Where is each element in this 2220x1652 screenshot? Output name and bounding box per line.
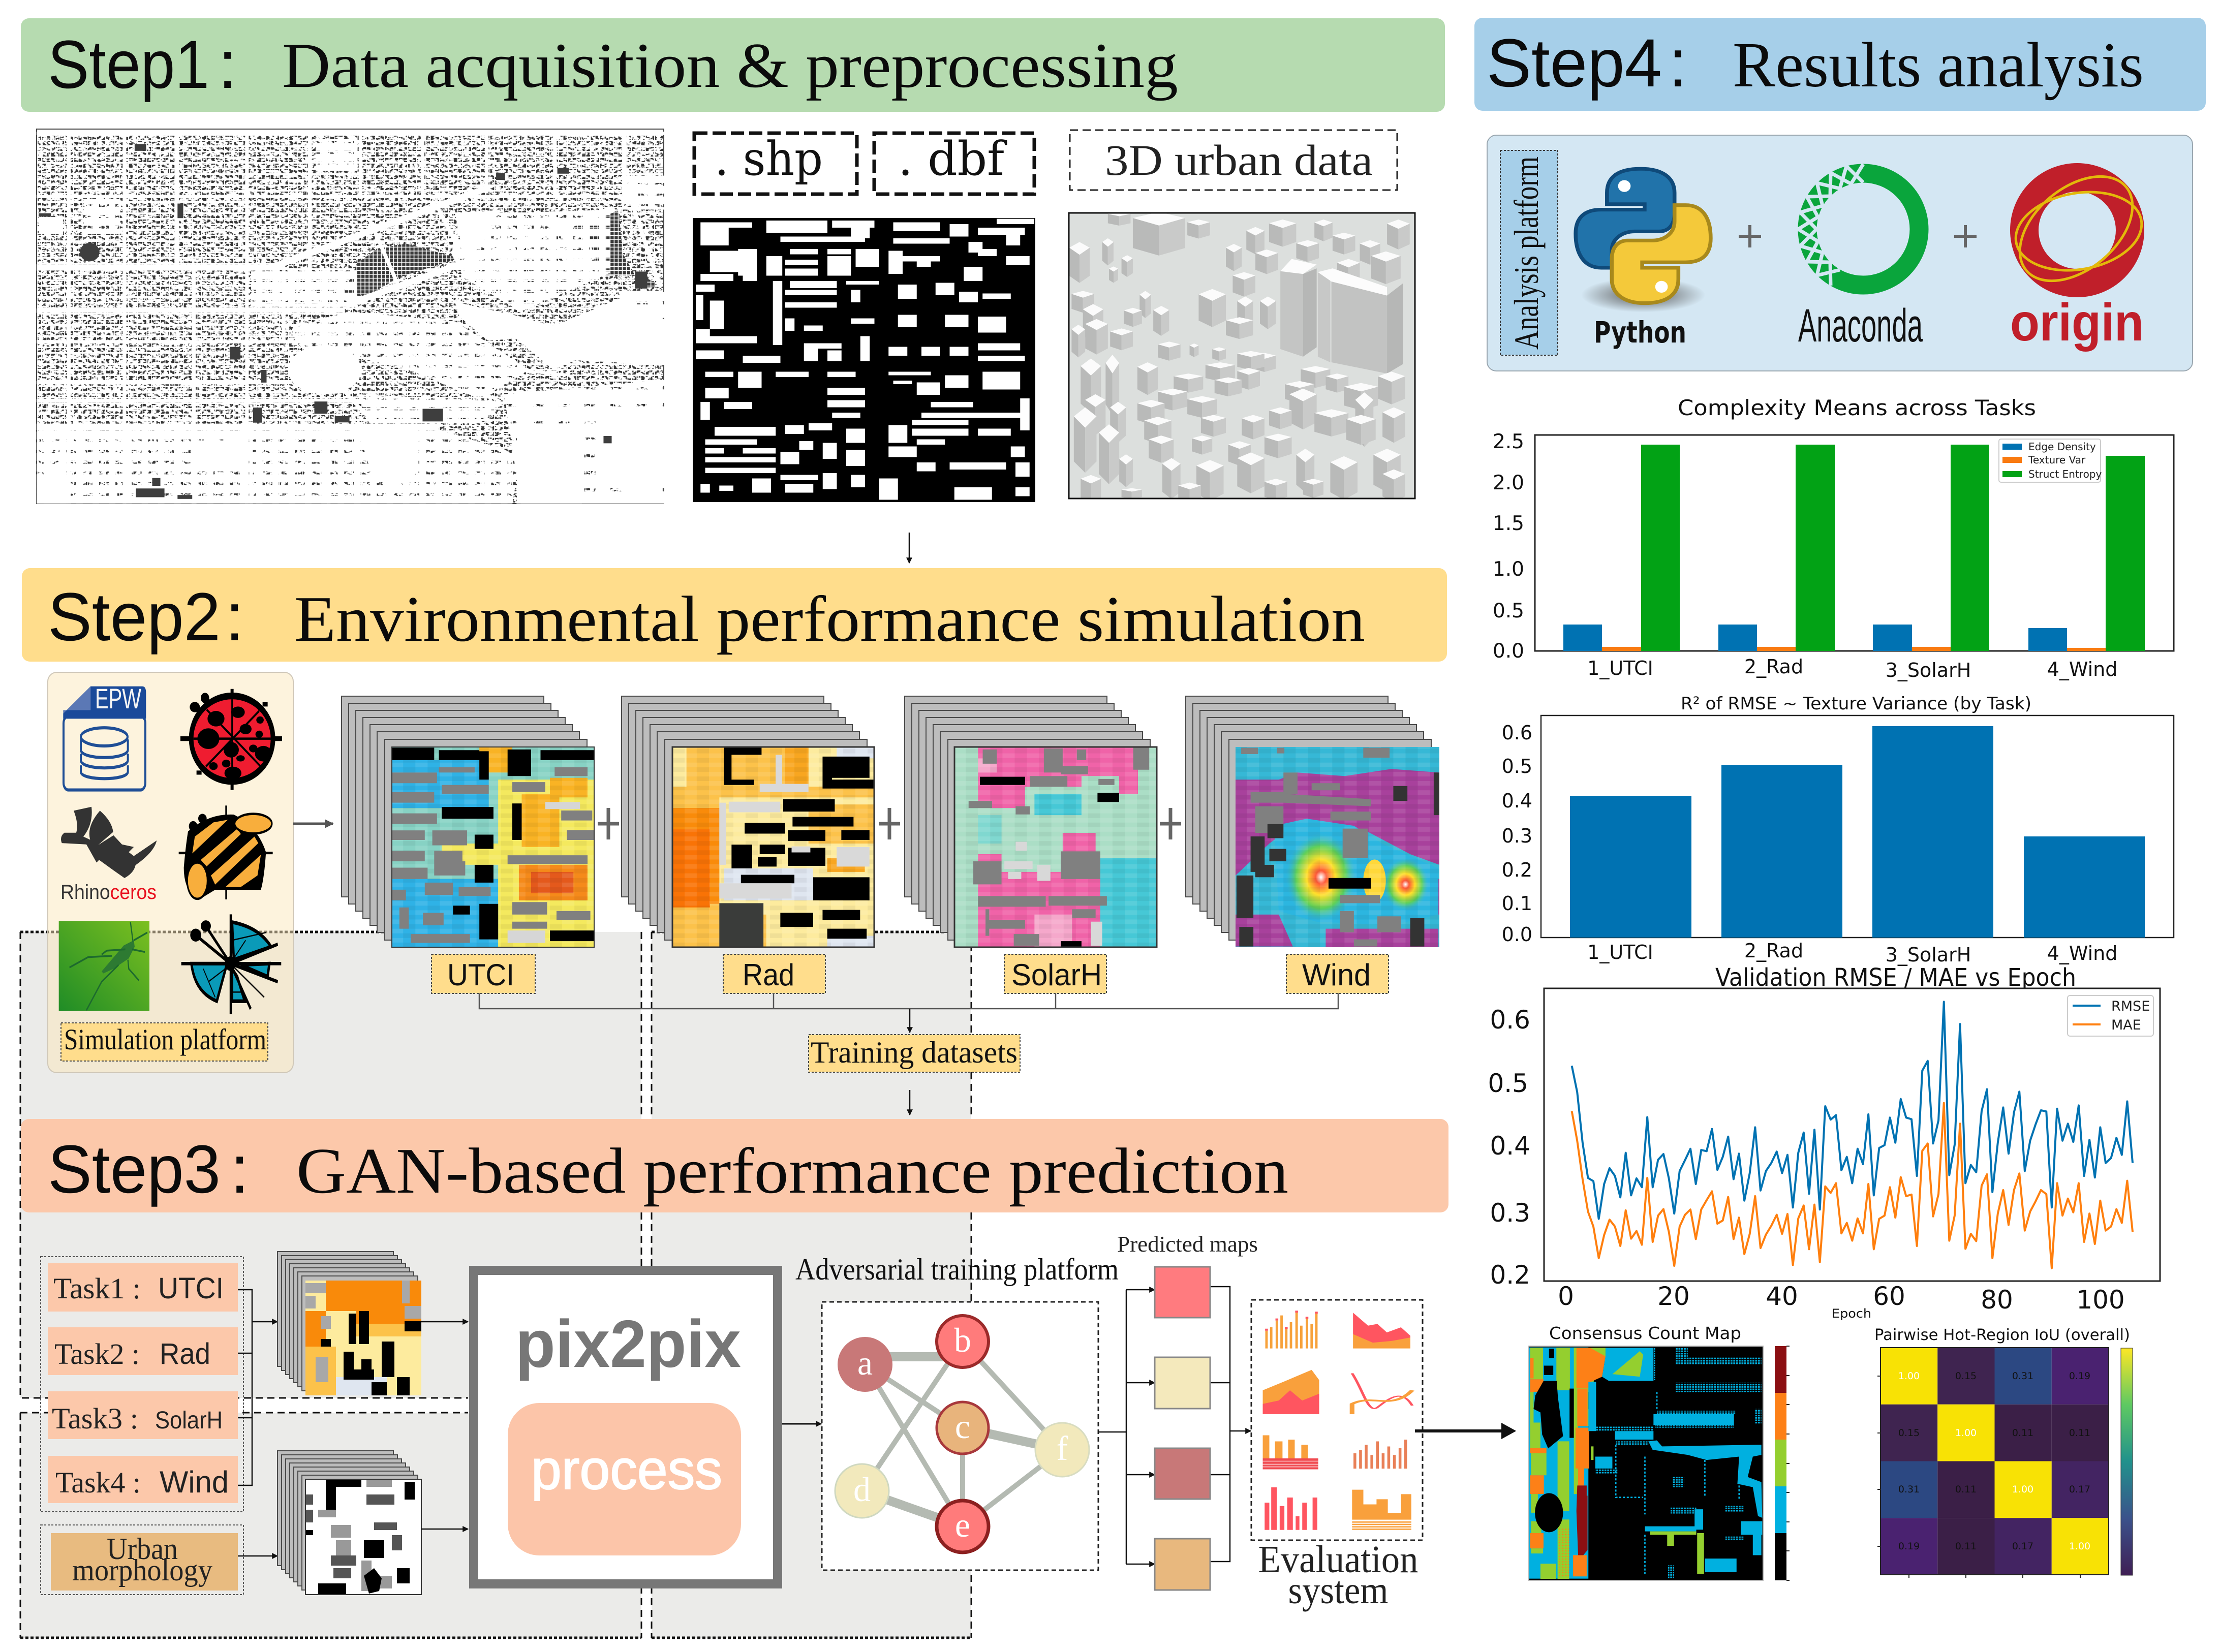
task 4: Wind bbox=[160, 1465, 229, 1499]
predicted maps connectors bbox=[1098, 1287, 1251, 1564]
x tick labels: 60 bbox=[1873, 1282, 1905, 1311]
y tick labels: 0.3 bbox=[1502, 825, 1532, 847]
heatmap cell values: 0.31 bbox=[2012, 1370, 2033, 1382]
icon: rhinoceros bbox=[61, 807, 157, 878]
label: training datasets: Training datasets bbox=[811, 1036, 1017, 1069]
arrow: morphology to pix2pix bbox=[421, 1529, 468, 1530]
icon: ladybug bbox=[180, 689, 282, 790]
predicted map squares bbox=[1155, 1267, 1210, 1590]
label: Rad: Rad bbox=[743, 958, 794, 992]
label: SolarH: SolarH bbox=[1011, 958, 1102, 992]
chart: R2 of RMSE vs texture variance bbox=[1502, 694, 2174, 966]
plus sign bbox=[1160, 808, 1181, 839]
node f: f bbox=[1057, 1429, 1068, 1468]
heading: step 3 bbox=[21, 1119, 1448, 1212]
node b: b bbox=[954, 1321, 971, 1359]
task 2 bbox=[48, 1327, 238, 1375]
heatmap cell values: 1.00 bbox=[1898, 1370, 1920, 1382]
heading: step 4: Results analysis bbox=[1733, 30, 2144, 101]
arrow: pix2pix to network bbox=[782, 1423, 821, 1425]
stack: SolarH map bbox=[905, 696, 1157, 947]
label: UTCI bbox=[431, 954, 535, 993]
icon: EPW database bbox=[63, 687, 146, 790]
arrow: urban morphology to stack bbox=[238, 1555, 278, 1556]
text: EPW: EPW bbox=[95, 682, 141, 714]
stack: morphology map bbox=[278, 1451, 421, 1595]
y tick labels: 0.3 bbox=[1490, 1198, 1530, 1228]
stack: Wind map bbox=[1186, 696, 1439, 947]
panel: task group bbox=[41, 1257, 243, 1512]
y tick labels bbox=[1493, 430, 1524, 663]
y tick labels: 0.5 bbox=[1502, 755, 1532, 777]
node a: a bbox=[857, 1344, 873, 1382]
network diagram bbox=[822, 1302, 1098, 1570]
task 1: UTCI bbox=[158, 1272, 224, 1305]
heatmap cell values: 0.31 bbox=[1898, 1484, 1920, 1495]
task 2: Task2 : bbox=[54, 1337, 140, 1370]
y tick labels bbox=[1502, 722, 1532, 946]
panel: pix2pix bbox=[474, 1270, 778, 1584]
x tick labels: 3_SolarH bbox=[1886, 944, 1971, 966]
legend bbox=[2068, 995, 2153, 1036]
heatmap cell values: 0.17 bbox=[2069, 1484, 2090, 1495]
arrow: step 1 to step 2 bbox=[909, 533, 910, 563]
x tick labels: 1_UTCI bbox=[1587, 657, 1653, 679]
line: RMSE bbox=[1572, 1002, 2133, 1219]
logo: python: Python bbox=[1594, 315, 1686, 350]
node e: e bbox=[955, 1506, 970, 1544]
bars: struct entropy bbox=[1641, 445, 2145, 651]
chart: complexity means across tasks: Complexity Means across Tasks bbox=[1678, 395, 2036, 420]
label: .dbf: . dbf bbox=[898, 132, 1007, 186]
heading: step 2 bbox=[22, 568, 1447, 662]
legend: Struct Entropy bbox=[2028, 468, 2102, 480]
legend: MAE bbox=[2111, 1017, 2141, 1033]
text: Rhinoceros: Rhinoceros bbox=[60, 881, 157, 903]
heading: step 1: : bbox=[218, 27, 237, 103]
plus sign bbox=[598, 808, 619, 839]
x tick labels: 100 bbox=[2076, 1285, 2125, 1315]
arrow: to training datasets bbox=[909, 1009, 910, 1033]
y tick labels bbox=[1488, 1005, 1530, 1290]
node b bbox=[937, 1316, 989, 1367]
chart: pairwise hot-region IoU bbox=[1874, 1326, 2133, 1578]
plus sign bbox=[1954, 225, 1977, 247]
mini chart 8 bbox=[1352, 1490, 1411, 1529]
chart: consensus count map: Consensus Count Map bbox=[1549, 1323, 1741, 1343]
line: MAE bbox=[1572, 1103, 2133, 1268]
mini chart 5 bbox=[1263, 1435, 1318, 1469]
y tick labels: 0.4 bbox=[1502, 790, 1532, 812]
task 4 bbox=[48, 1456, 238, 1503]
logo: python bbox=[1576, 169, 1711, 350]
arrow: evaluation to results bbox=[1415, 1425, 1513, 1437]
icon: grasshopper bbox=[59, 921, 149, 1011]
panel: urban morphology: morphology bbox=[72, 1553, 212, 1587]
logo: origin: origin bbox=[2010, 293, 2144, 352]
heading: step 3: : bbox=[230, 1132, 249, 1207]
city figure-ground map bbox=[37, 129, 668, 504]
heatmap cell values: 0.11 bbox=[1955, 1484, 1977, 1495]
mini chart 4 bbox=[1352, 1373, 1412, 1414]
label: 3D urban data: 3D urban data bbox=[1105, 136, 1373, 184]
y tick labels: 0.6 bbox=[1502, 722, 1532, 744]
y tick labels: 0.5 bbox=[1488, 1069, 1528, 1098]
colorbar bbox=[2121, 1348, 2133, 1575]
label: Rad bbox=[723, 954, 825, 993]
x tick labels bbox=[1587, 656, 2117, 681]
heading: step 2: : bbox=[225, 579, 244, 655]
plus sign bbox=[879, 808, 900, 839]
label: evaluation system bbox=[1258, 1538, 1418, 1612]
panel: urban morphology bbox=[41, 1525, 243, 1595]
legend bbox=[1999, 439, 2102, 482]
y tick labels: 1.0 bbox=[1493, 558, 1524, 581]
y tick labels: 0.0 bbox=[1502, 923, 1532, 946]
task 1 bbox=[48, 1263, 238, 1312]
background gray dashed regions bbox=[20, 932, 971, 1638]
heatmap cell values bbox=[1898, 1370, 2090, 1552]
heatmap cell values: 1.00 bbox=[2069, 1541, 2090, 1552]
bracket connector to training datasets bbox=[479, 993, 1338, 1009]
x tick labels: 40 bbox=[1766, 1282, 1798, 1311]
stack: task output map bbox=[278, 1252, 421, 1395]
arrow: platform to maps bbox=[293, 822, 333, 825]
heatmap cell values: 0.19 bbox=[2069, 1370, 2090, 1382]
label: predicted maps: Predicted maps bbox=[1117, 1232, 1258, 1257]
stack: Rad map bbox=[622, 696, 874, 947]
x tick labels: 80 bbox=[1981, 1285, 2013, 1315]
heatmap cell values: 0.11 bbox=[2069, 1427, 2090, 1439]
label: analysis platform: Analysis platform bbox=[1507, 157, 1546, 350]
arrow: map to pix2pix bbox=[421, 1321, 468, 1322]
arrow: to step 3 bbox=[909, 1090, 910, 1115]
building footprint black-white map bbox=[693, 218, 1035, 502]
plus sign bbox=[1739, 225, 1761, 247]
heatmap cell values: 1.00 bbox=[2012, 1484, 2033, 1495]
icon: honeybee bbox=[179, 805, 273, 900]
task 3 bbox=[48, 1391, 238, 1439]
x tick labels: 4_Wind bbox=[2047, 658, 2117, 680]
task 2: Rad bbox=[160, 1337, 210, 1370]
x tick labels: 2_Rad bbox=[1744, 940, 1803, 962]
colorbar bbox=[1775, 1346, 1790, 1580]
label: evaluation system: Evaluation bbox=[1258, 1538, 1418, 1581]
bars bbox=[1570, 726, 2145, 938]
legend: Texture Var bbox=[2028, 454, 2086, 466]
heading: step 1 bbox=[21, 18, 1445, 112]
heatmap cell values: 0.15 bbox=[1898, 1427, 1920, 1439]
label: .shp bbox=[694, 132, 857, 194]
chart: complexity means across tasks bbox=[1493, 395, 2174, 681]
panel: urban morphology: Urban bbox=[107, 1532, 178, 1566]
panel: simulation platform bbox=[48, 672, 293, 1073]
x tick labels: 0 bbox=[1558, 1282, 1574, 1311]
label: Wind bbox=[1286, 954, 1389, 993]
x tick labels: 20 bbox=[1657, 1282, 1690, 1311]
process box: process bbox=[531, 1439, 722, 1501]
y tick labels: 0.1 bbox=[1502, 892, 1532, 915]
node c: c bbox=[955, 1407, 970, 1446]
stack: UTCI map bbox=[342, 696, 594, 947]
task 3: SolarH bbox=[155, 1407, 223, 1434]
icon: butterfly bbox=[181, 914, 281, 1014]
mini chart 3 bbox=[1263, 1370, 1319, 1414]
legend: RMSE bbox=[2111, 999, 2150, 1014]
3D urban model bbox=[1069, 212, 1415, 504]
x tick labels: 2_Rad bbox=[1744, 656, 1803, 678]
x tick labels bbox=[1558, 1282, 2125, 1315]
heatmap cell values: 0.11 bbox=[2012, 1427, 2033, 1439]
y tick labels: 0.2 bbox=[1490, 1260, 1530, 1290]
panel: pix2pix: pix2pix bbox=[515, 1306, 741, 1381]
y tick labels: 2.5 bbox=[1493, 430, 1524, 453]
panel: evaluation system charts bbox=[1251, 1300, 1423, 1540]
heading: step 1: Data acquisition & preprocessing bbox=[282, 30, 1178, 101]
label: 3D urban data bbox=[1070, 130, 1397, 190]
heading: step 2: Step2 bbox=[48, 579, 221, 655]
label: simulation platform: Simulation platform bbox=[64, 1023, 266, 1056]
bars: texture var bbox=[1602, 647, 2106, 651]
logo: anaconda: Anaconda bbox=[1798, 300, 1923, 352]
chart: R2 of RMSE vs texture variance: R² of RMSE ~ Texture Variance (by Task) bbox=[1681, 694, 2031, 714]
chart: consensus count map bbox=[1529, 1323, 1790, 1580]
bars: edge density bbox=[1563, 625, 2067, 651]
mini chart 6 bbox=[1355, 1440, 1406, 1469]
panel: analysis platform bbox=[1487, 135, 2193, 371]
chart: validation RMSE and MAE vs epoch: Validation RMSE / MAE vs Epoch bbox=[1715, 963, 2076, 992]
chart: validation RMSE and MAE vs epoch bbox=[1488, 963, 2160, 1321]
heatmap cell values: 1.00 bbox=[1955, 1427, 1977, 1439]
x tick labels bbox=[1587, 940, 2117, 966]
node d bbox=[835, 1464, 889, 1518]
x tick labels: 3_SolarH bbox=[1886, 659, 1971, 681]
heading: step 3: GAN-based performance prediction bbox=[296, 1135, 1288, 1207]
label: adversarial training platform: Adversarial training platform bbox=[795, 1253, 1119, 1286]
y tick labels: 1.5 bbox=[1493, 512, 1524, 535]
y tick labels: 0.2 bbox=[1502, 859, 1532, 881]
node a bbox=[838, 1337, 892, 1392]
x tick labels: 1_UTCI bbox=[1587, 941, 1653, 963]
process box bbox=[508, 1403, 741, 1555]
node c bbox=[937, 1402, 989, 1454]
node d: d bbox=[853, 1470, 871, 1509]
legend: Edge Density bbox=[2028, 441, 2096, 453]
label: .dbf bbox=[874, 132, 1034, 194]
heading: step 1: Step1 bbox=[48, 27, 209, 103]
y tick labels: 0.4 bbox=[1490, 1131, 1530, 1161]
label: .shp: . shp bbox=[715, 132, 823, 186]
logo: anaconda bbox=[1798, 164, 1923, 352]
task 4: Task4 : bbox=[55, 1466, 141, 1499]
y tick labels: 0.6 bbox=[1490, 1005, 1530, 1035]
task 1: Task1 : bbox=[53, 1272, 141, 1305]
mini chart 1 bbox=[1267, 1311, 1316, 1349]
y tick labels: 0.5 bbox=[1493, 600, 1524, 622]
task bracket arrow bbox=[238, 1290, 278, 1485]
heatmap cell values: 0.11 bbox=[1955, 1541, 1977, 1552]
heading: step 4: : bbox=[1669, 25, 1687, 101]
task 3: Task3 : bbox=[52, 1402, 138, 1435]
node f bbox=[1035, 1423, 1089, 1477]
heatmap cell values: 0.15 bbox=[1955, 1370, 1977, 1382]
heading: step 4 bbox=[1474, 18, 2206, 111]
x axis label: Epoch bbox=[1832, 1306, 1871, 1321]
label: analysis platform bbox=[1500, 150, 1558, 355]
label: UTCI: UTCI bbox=[447, 958, 514, 992]
x tick labels: 4_Wind bbox=[2047, 942, 2117, 964]
chart: pairwise hot-region IoU: Pairwise Hot-Region IoU (overall) bbox=[1874, 1326, 2130, 1344]
heading: step 2: Environmental performance simulation bbox=[294, 583, 1365, 655]
logo: origin bbox=[2000, 155, 2152, 352]
heading: step 4: Step4 bbox=[1487, 25, 1662, 101]
mini chart 7 bbox=[1265, 1487, 1317, 1530]
label: Wind: Wind bbox=[1302, 958, 1371, 992]
label: evaluation system: system bbox=[1288, 1569, 1389, 1612]
mini chart 2 bbox=[1353, 1313, 1410, 1349]
heatmap cell values: 0.17 bbox=[2012, 1541, 2033, 1552]
heatmap cell values: 0.19 bbox=[1898, 1541, 1920, 1552]
y tick labels: 0.0 bbox=[1493, 640, 1524, 663]
heading: step 3: Step3 bbox=[48, 1132, 221, 1207]
node e bbox=[937, 1501, 989, 1552]
y tick labels: 2.0 bbox=[1493, 472, 1524, 494]
